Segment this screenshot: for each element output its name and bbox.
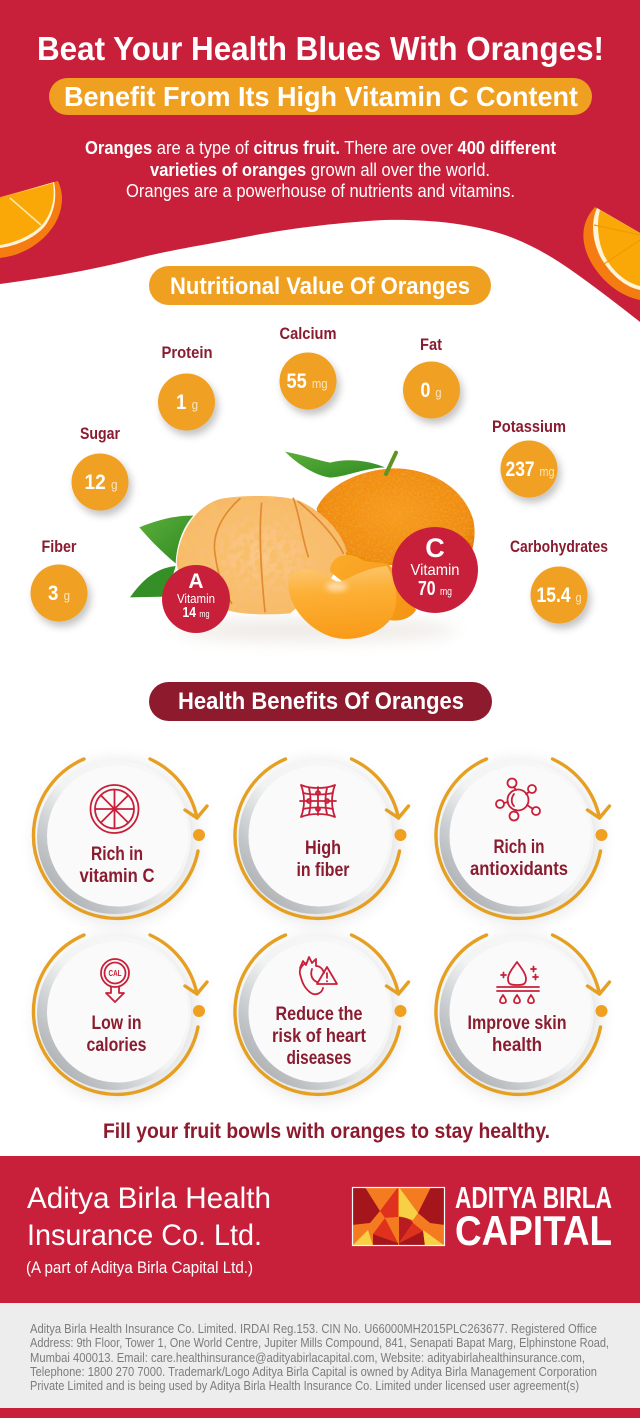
label: High <box>305 838 341 859</box>
icon: calorie down: CAL <box>108 969 122 978</box>
card: rich in antioxidants <box>436 759 610 922</box>
label: health <box>492 1035 542 1056</box>
intro text: Oranges are a powerhouse of nutrients and vitamins. <box>126 181 515 201</box>
heading pill: health benefits <box>149 682 492 721</box>
intro text <box>85 138 556 201</box>
legal text panel: Mumbai 400013. Email: care.healthinsurance@adityabirlacapital.com, Website: adityabirlahealthinsurance.com, <box>30 1351 585 1365</box>
label: Rich in <box>91 844 143 865</box>
label: diseases <box>286 1048 352 1069</box>
icon: calorie down <box>101 959 129 1002</box>
label <box>86 1013 146 1056</box>
badge: vitamin A <box>162 565 230 633</box>
badge: vitamin A: A <box>188 570 204 593</box>
label: antioxidants <box>470 859 568 880</box>
label: Rich in <box>494 837 544 858</box>
label: vitamin C <box>80 866 155 887</box>
header red wave background <box>0 0 640 322</box>
heading pill: nutritional value <box>149 266 491 305</box>
card: high in fiber <box>235 759 408 922</box>
heading pill: health benefits: Health Benefits Of Oranges <box>178 688 464 715</box>
label <box>80 844 155 887</box>
icon: skin drop <box>497 962 539 1003</box>
icon: fiber mesh <box>300 785 336 817</box>
nutrient: calcium <box>280 324 336 410</box>
badge: vitamin A: 14 mg <box>182 604 210 621</box>
intro text: Oranges are a type of citrus fruit. There are over 400 different <box>85 138 556 158</box>
nutrient: potassium: Potassium <box>492 417 566 436</box>
heading pill: nutritional value: Nutritional Value Of Oranges <box>170 273 470 300</box>
nutrient: fat: Fat <box>420 335 442 354</box>
nutrient: calcium: Calcium <box>280 324 336 343</box>
legal text panel <box>0 1303 640 1408</box>
logo mark <box>352 1187 445 1246</box>
bottom red strip <box>0 1408 640 1418</box>
label <box>468 1013 566 1056</box>
closing message: Fill your fruit bowls with oranges to stay healthy. <box>103 1120 550 1143</box>
label: calories <box>86 1035 146 1056</box>
icon: citrus slice <box>90 785 138 833</box>
label: risk of heart <box>272 1026 367 1047</box>
label <box>296 838 350 881</box>
icon: left orange slice <box>0 181 62 258</box>
nutrient: potassium <box>492 417 566 498</box>
card: reduce heart disease risk <box>235 935 408 1098</box>
label <box>272 1004 367 1069</box>
card: improve skin health <box>436 935 610 1098</box>
nutrient: sugar <box>72 424 128 510</box>
badge: vitamin C: C <box>425 533 445 563</box>
card: rich in vitamin C <box>33 759 207 922</box>
nutrient: protein: 1 g <box>176 391 198 414</box>
company name: (A part of Aditya Birla Capital Ltd.) <box>26 1258 253 1277</box>
nutrient: fiber: Fiber <box>42 537 77 556</box>
badge: vitamin A: Vitamin <box>177 591 215 606</box>
nutrient: fat <box>403 335 460 418</box>
label: in fiber <box>296 860 350 881</box>
label: Improve skin <box>468 1013 566 1034</box>
intro text: varieties of oranges grown all over the world. <box>150 160 490 180</box>
nutrient: carbohydrates <box>510 537 608 624</box>
company name <box>26 1182 271 1277</box>
badge: vitamin C: Vitamin <box>410 562 460 579</box>
logo wordmark <box>455 1180 612 1254</box>
nutrient: protein: Protein <box>162 343 212 362</box>
logo wordmark: CAPITAL <box>455 1207 612 1254</box>
company name: Aditya Birla Health <box>27 1182 271 1215</box>
illustration: oranges <box>130 452 475 642</box>
legal text panel: Private Limited and is being used by Aditya Birla Health Insurance Co. Limited under licensed user agreement(s) <box>30 1379 579 1393</box>
label: Low in <box>92 1013 142 1034</box>
label: Reduce the <box>276 1004 362 1025</box>
label <box>470 837 568 880</box>
nutrient: carbohydrates: 15.4 g <box>536 584 582 607</box>
nutrient: sugar: 12 g <box>84 471 118 494</box>
subtitle pill: Benefit From Its High Vitamin C Content <box>64 81 578 112</box>
footer brand band <box>0 1156 640 1303</box>
nutrient: protein <box>158 343 215 430</box>
icon: heart with warning <box>300 957 337 994</box>
icon: molecule <box>496 778 540 820</box>
card: low in calories <box>33 935 207 1098</box>
nutrient: fiber <box>30 537 88 622</box>
nutrient: calcium: 55 mg <box>286 370 328 393</box>
badge: vitamin C <box>392 527 478 613</box>
badge: vitamin C: 70 mg <box>418 578 452 600</box>
icon: right orange slice <box>583 207 640 300</box>
nutrient: sugar: Sugar <box>80 424 120 443</box>
nutrient: fiber: 3 g <box>48 582 70 605</box>
nutrient: carbohydrates: Carbohydrates <box>510 537 608 556</box>
company name: Insurance Co. Ltd. <box>27 1219 262 1252</box>
nutrient: fat: 0 g <box>420 379 442 402</box>
title: Beat Your Health Blues With Oranges! <box>37 30 604 67</box>
nutrient: potassium: 237 mg <box>506 458 554 481</box>
